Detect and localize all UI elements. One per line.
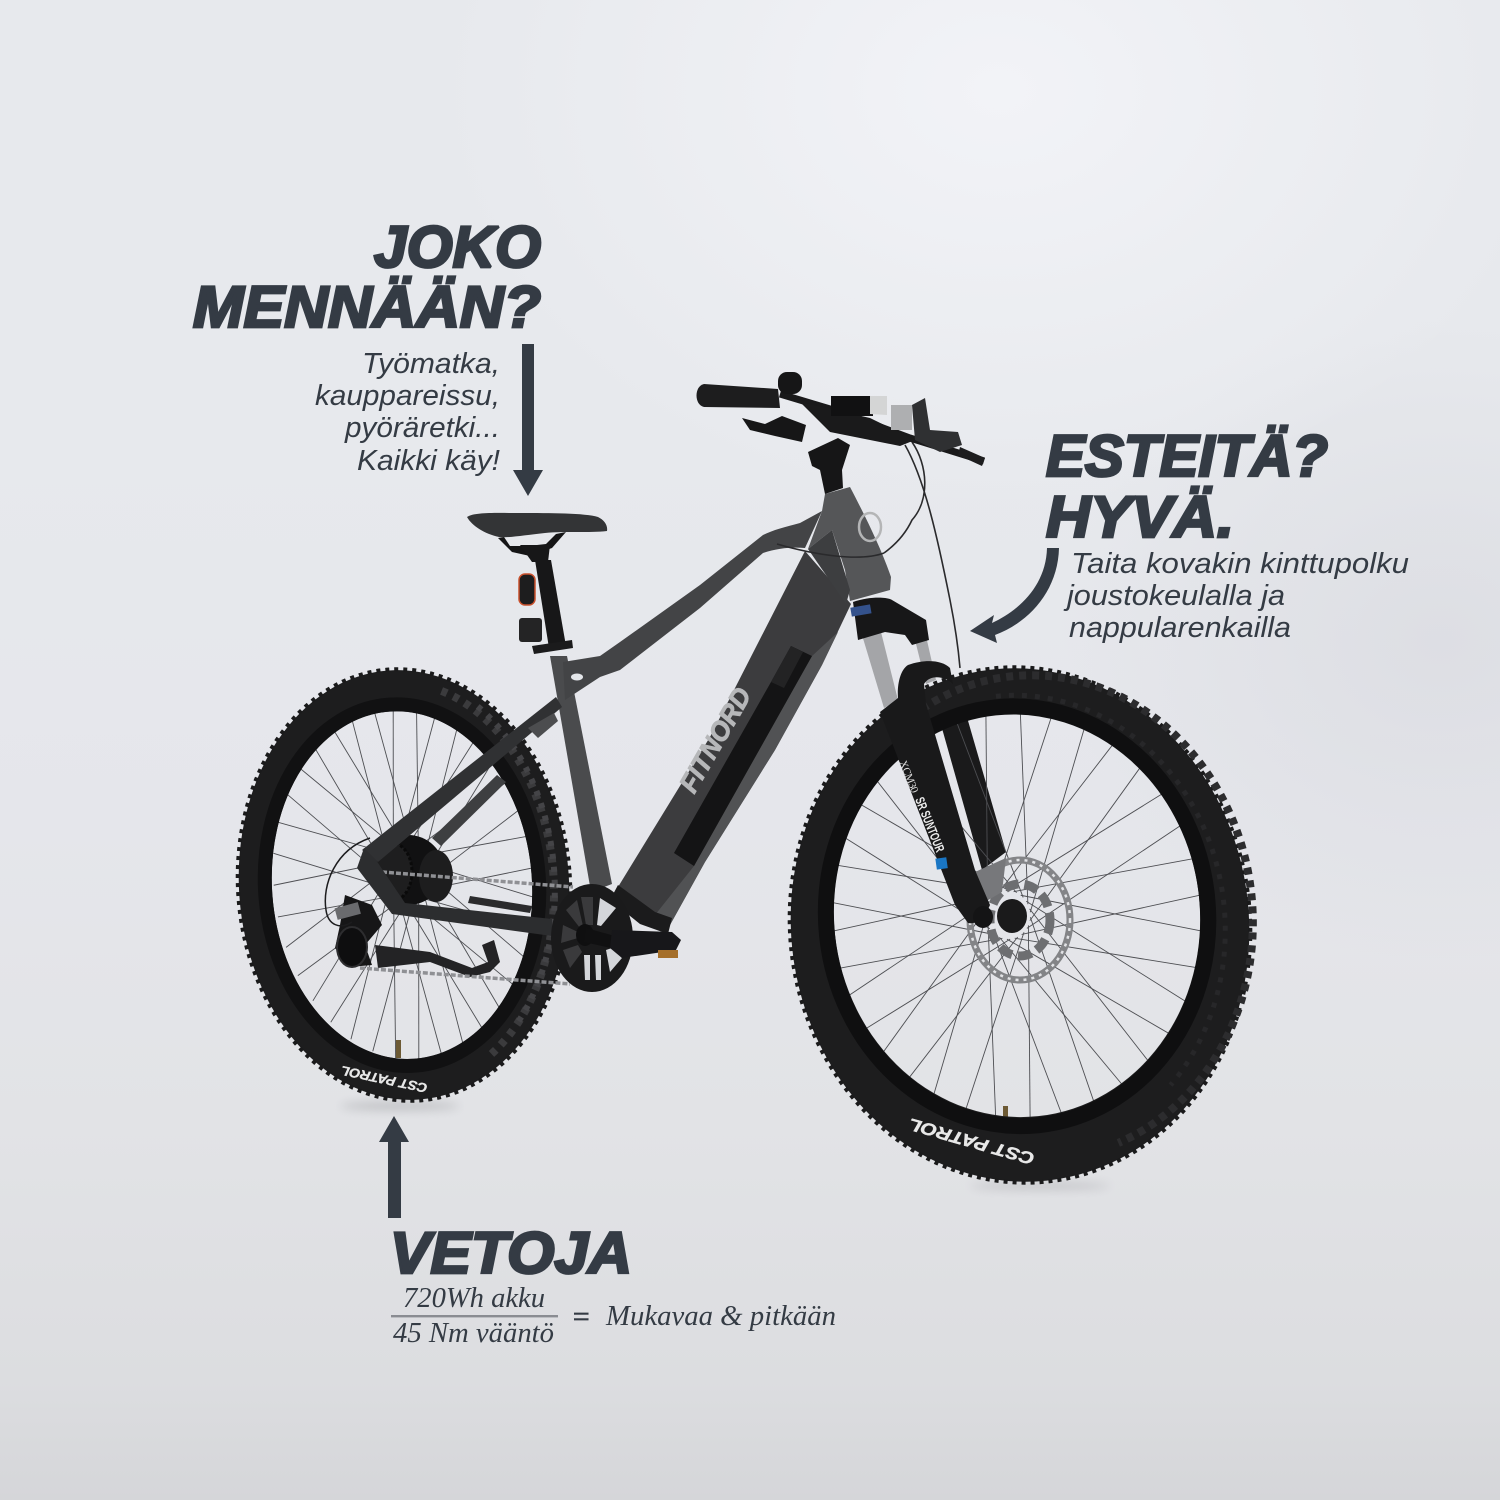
text: commuting	[315, 348, 500, 477]
right brake control	[912, 398, 962, 452]
head tube logo	[859, 513, 881, 541]
cables	[777, 442, 960, 668]
fork brand decal: SR SUNTOUR	[912, 795, 948, 855]
lighter lower strip	[655, 632, 838, 925]
kickstand	[375, 940, 500, 977]
seat clamp	[532, 640, 573, 654]
rear wheel	[223, 658, 585, 1112]
fork crown	[853, 598, 929, 645]
gusset hole	[571, 674, 583, 680]
front axle	[973, 906, 993, 928]
heading: joko mennään: JOKO	[374, 215, 541, 280]
fork model decal: XCM30	[897, 759, 921, 795]
bar clutter	[800, 402, 915, 446]
front tyre	[764, 644, 1279, 1206]
floor shadows	[340, 1102, 1110, 1189]
brake disc	[970, 858, 1070, 980]
rear tyre	[223, 658, 585, 1112]
text: suspension: joustokeulalla ja	[1063, 580, 1285, 612]
seat post	[535, 560, 566, 648]
front valve	[1003, 1106, 1008, 1123]
seat tube	[550, 656, 612, 892]
fork blue square	[935, 857, 948, 870]
far chain stay	[468, 896, 532, 913]
heading: esteitä hyvä: HYVÄ.	[1046, 485, 1234, 550]
rear hub motor and cassette	[372, 835, 453, 905]
text: suspension	[1063, 548, 1409, 644]
heading: joko mennään: MENNÄÄN?	[193, 275, 541, 340]
heading: esteitä hyvä	[1046, 424, 1328, 550]
shifter and brake lever	[742, 416, 806, 442]
fork adjuster	[850, 604, 872, 617]
far fork leg	[934, 700, 1006, 870]
near fork leg and arch	[880, 661, 990, 923]
display unit	[831, 396, 873, 416]
gear cable	[325, 838, 370, 926]
formula: 720Wh akku	[403, 1283, 545, 1314]
text: suspension: Taita kovakin kinttupolku	[1071, 548, 1409, 580]
seat stay and bridge	[362, 697, 562, 862]
motor housing	[610, 885, 672, 934]
stanchion	[862, 628, 898, 708]
left grip	[696, 384, 780, 408]
front lamp	[870, 396, 887, 415]
arrow: down to saddle	[513, 344, 543, 496]
formula: Mukavaa & pitkään	[605, 1301, 836, 1332]
down tube with battery	[610, 551, 851, 934]
rear derailleur	[335, 895, 382, 967]
text: commuting: kauppareissu,	[315, 380, 500, 412]
arrow: up to tyre	[379, 1116, 409, 1218]
text: commuting: pyöräretki...	[344, 412, 500, 444]
rear spokes	[261, 684, 551, 1068]
right grip end	[958, 447, 985, 466]
far seat stay	[432, 775, 506, 846]
saddle	[467, 513, 607, 562]
chain	[360, 872, 573, 984]
text: commuting: Kaikki käy!	[357, 445, 500, 477]
front spokes	[791, 683, 1225, 1147]
heading: joko mennään	[193, 215, 541, 340]
rear valve	[396, 1040, 401, 1058]
crank and chainring	[551, 884, 633, 992]
head tube	[808, 487, 891, 604]
top rear light	[519, 574, 535, 605]
brand logo: FITNORD	[673, 682, 757, 798]
handlebar	[696, 372, 985, 466]
crank arm and pedal	[584, 928, 681, 958]
stem and steerer	[808, 438, 850, 494]
heading: vetoja: VETOJA	[390, 1221, 632, 1286]
arrow: curved to fork	[970, 548, 1059, 643]
silver control	[891, 405, 912, 430]
front tyre lettering: CST PATROL	[906, 1114, 1037, 1168]
far stanchion	[915, 636, 936, 684]
formula	[391, 1283, 836, 1349]
text: commuting: Työmatka,	[362, 348, 500, 380]
bicycle	[223, 372, 1279, 1206]
front wheel	[764, 644, 1279, 1206]
brake bridge	[528, 713, 558, 738]
formula: 45 Nm vääntö	[393, 1318, 554, 1349]
top tube	[563, 511, 822, 700]
formula: =	[571, 1302, 591, 1333]
bell	[778, 372, 802, 394]
rear tyre lettering: CST PATROL	[339, 1063, 429, 1096]
battery lock	[771, 646, 803, 688]
text: suspension: nappularenkailla	[1069, 612, 1291, 644]
brake caliper	[975, 858, 1006, 906]
chain stay	[357, 848, 552, 936]
battery panel	[674, 646, 812, 866]
heading: esteitä hyvä: ESTEITÄ?	[1046, 424, 1328, 489]
lower rear light	[519, 618, 542, 642]
